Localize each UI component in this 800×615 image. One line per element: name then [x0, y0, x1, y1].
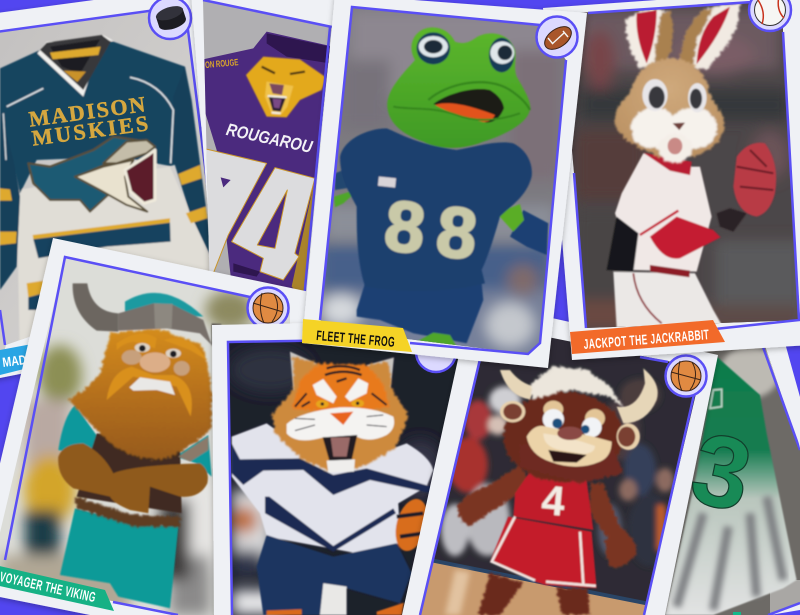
label: Fleet the Frog: FLEET THE FROG	[316, 327, 396, 350]
viking mascot	[58, 283, 222, 608]
blurred stadium background	[575, 10, 800, 330]
number 74	[203, 148, 315, 280]
card: Voyager the Viking	[0, 238, 310, 615]
label: Madison	[0, 344, 32, 375]
jersey	[665, 357, 797, 615]
Madison Muskies wordmark: MUSKIES	[30, 110, 150, 151]
bull mascot	[457, 366, 658, 615]
card: tiger mascot	[212, 320, 480, 615]
blurred crowd background	[230, 348, 450, 615]
label: Jackpot the Jackrabbit	[570, 320, 725, 354]
hockey jersey art	[0, 34, 209, 340]
frog mascot	[334, 27, 548, 347]
purple jersey art	[204, 32, 330, 291]
badge: football	[536, 16, 578, 58]
card: Madison Muskies hockey jersey	[0, 0, 210, 383]
jersey number 4: 4	[540, 476, 567, 525]
label: Fleet the Frog	[302, 319, 412, 352]
badge: hockey puck	[149, 0, 191, 39]
badge: basketball	[666, 356, 706, 396]
badge: basketball	[248, 288, 288, 328]
card: green jersey	[665, 346, 800, 615]
label: Madison: MADI	[2, 352, 30, 370]
card: Rougarou jersey	[188, 0, 334, 319]
blurred crowd background	[441, 379, 674, 566]
flag patch	[378, 176, 396, 188]
jersey number 88: 8	[381, 186, 429, 269]
blurred crowd background	[0, 290, 255, 615]
label: Jackpot the Jackrabbit: JACKPOT THE JACKRABBIT	[583, 326, 710, 352]
badge: tiger card	[416, 332, 456, 372]
label: Voyager the Viking	[0, 565, 114, 611]
Madison Muskies wordmark	[28, 96, 148, 146]
badge: baseball	[749, 0, 791, 31]
wolf logo	[246, 57, 326, 117]
muskie fish logo	[28, 137, 155, 212]
collar	[37, 35, 113, 97]
rabbit mascot	[607, 4, 776, 333]
card: Fleet the Frog	[302, 0, 587, 368]
Madison Muskies wordmark: MADISON	[27, 91, 147, 132]
number 3: 3	[682, 410, 761, 534]
jersey number 88	[384, 199, 477, 260]
card: bull mascot	[400, 300, 718, 615]
jersey number 88: 8	[433, 191, 481, 275]
city wordmark: ON ROUGE	[205, 57, 239, 70]
Rougarou wordmark: ROUGAROU	[225, 119, 315, 157]
blurred stadium background	[320, 10, 560, 360]
card: Jackpot the Jackrabbit	[543, 0, 800, 360]
tiger mascot	[232, 352, 433, 615]
